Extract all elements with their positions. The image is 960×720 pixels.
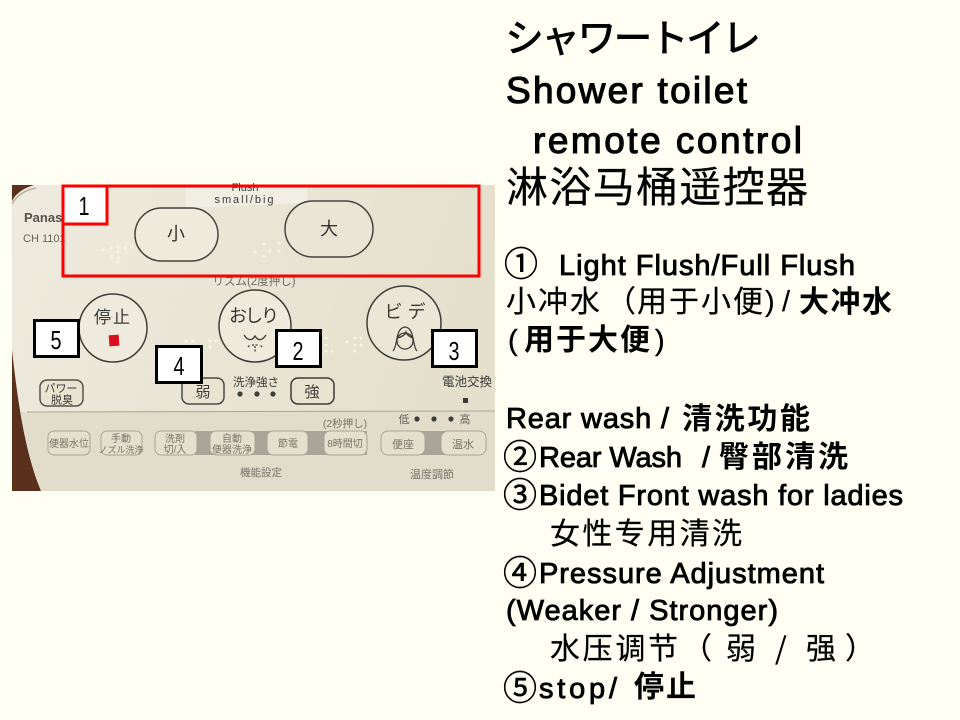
item 4: pressure adjustment: 水压调节 [550, 624, 678, 668]
label: temperature level: 高 [460, 412, 470, 426]
button: power deodorize [40, 380, 83, 406]
number tag 4 [156, 346, 202, 382]
item 1: light flush / full flush: ) [765, 286, 775, 318]
item 2: rear wash [503, 430, 848, 479]
item 5: stop: 停止 [634, 662, 696, 706]
small buttons row: 節電 [278, 437, 298, 450]
number tag 3 [432, 330, 476, 366]
item 4: pressure adjustment: (Weaker / Stronger) [506, 595, 778, 627]
item 1: light flush / full flush: ) [655, 325, 665, 357]
divider [27, 411, 495, 412]
brand label: Panas [24, 210, 62, 225]
item 3: bidet: 女性专用清洗 [550, 509, 742, 553]
button: strong: 強 [304, 384, 320, 401]
item 4: pressure adjustment [503, 546, 875, 668]
item 1: light flush / full flush: 小冲水 [506, 277, 600, 321]
small buttons row: ノズル洗浄 [98, 444, 144, 455]
label: battery change [442, 375, 492, 403]
item 3: bidet [503, 468, 903, 553]
title: English line 1: Shower toilet [506, 70, 748, 111]
button: stop: 停止 [94, 303, 130, 328]
item 1: light flush / full flush: 用于大便 [524, 315, 650, 359]
item 5: stop: stop/ [539, 673, 618, 705]
item 3: bidet: Bidet Front wash for ladies [539, 480, 903, 512]
number tag 4: 4 [174, 351, 184, 381]
item 1: light flush / full flush: / [782, 286, 791, 318]
small buttons row [48, 431, 486, 456]
item 4: pressure adjustment: 强 [806, 624, 836, 668]
item: rear wash heading: 清洗功能 [682, 394, 810, 438]
button: stop [79, 294, 147, 362]
item 4: pressure adjustment: 弱 [726, 624, 756, 668]
item 1: light flush / full flush: ( [508, 325, 518, 357]
item 4: pressure adjustment: / [775, 624, 787, 668]
title: Japanese: シャワートイレ [505, 8, 761, 64]
button band [195, 431, 480, 455]
item: rear wash heading: Rear wash / [506, 403, 670, 435]
item: rear wash heading [506, 394, 810, 438]
small buttons row: 温水 [452, 438, 474, 451]
item 1: light flush / full flush: ① [504, 237, 538, 286]
number tag 1 [63, 186, 107, 224]
button: small flush [135, 208, 218, 261]
button: strong [291, 378, 334, 404]
label: temperature adjust: 温度調節 [410, 467, 454, 481]
item 2: rear wash: Rear Wash [539, 442, 682, 474]
title: English line 2: remote control [533, 120, 802, 161]
braille dots [102, 242, 362, 352]
small buttons row: 便器水位 [49, 437, 89, 450]
item 4: pressure adjustment: Pressure Adjustment [539, 558, 824, 590]
item 5: stop: ⑤ [503, 661, 537, 710]
label: temperature level [398, 412, 470, 426]
button: big flush: 大 [320, 215, 338, 241]
small buttons row: 切/入 [164, 444, 186, 456]
label: rhythm: リズム(2度押し) [212, 274, 296, 288]
button: rear wash: おしり [229, 302, 279, 328]
button: power deodorize: パワー [44, 382, 78, 395]
label: battery change: 電池交換 [442, 375, 492, 389]
item 1: light flush / full flush: Light Flush/Full Flush [559, 250, 855, 282]
button: bidet: ビデ [384, 298, 426, 324]
small buttons row: 手動 [111, 432, 131, 445]
number tag 5 [34, 320, 78, 356]
highlight box 1: flush buttons [63, 186, 479, 276]
remote body [12, 185, 495, 491]
number tag 2: 2 [292, 336, 304, 366]
label: two second press: (2秒押し) [323, 417, 367, 430]
small buttons row: 自動 [222, 432, 242, 445]
button: bidet [367, 286, 441, 360]
number tag 3: 3 [448, 336, 460, 366]
sticker: flush small big: Flush [232, 182, 258, 194]
item 3: bidet: ③ [503, 468, 537, 517]
number tag 5: 5 [50, 325, 62, 355]
small buttons row: 洗剤 [165, 433, 185, 445]
button: small flush: 小 [167, 220, 185, 246]
sticker: flush small big: small/big [214, 194, 274, 206]
remote top edge highlight [12, 188, 36, 204]
item 4: pressure adjustment: ） [845, 624, 875, 668]
item 2: rear wash: / [702, 442, 711, 474]
label: wash strength [233, 375, 279, 397]
item 1: light flush / full flush [504, 237, 892, 359]
item 5: stop [503, 661, 696, 710]
small buttons row: 8時間切 [327, 438, 363, 450]
sticker: flush small big [186, 182, 308, 208]
icon: woman face [393, 327, 417, 351]
item 1: light flush / full flush: （ [606, 277, 636, 321]
lower section shade [20, 412, 244, 491]
number tag 1: 1 [78, 191, 90, 221]
small buttons row: 便器洗浄 [212, 443, 252, 456]
button: weak: 弱 [195, 384, 211, 401]
model label: CH 1101 [23, 233, 66, 245]
small buttons row: 便座 [392, 438, 414, 451]
label: function settings: 機能設定 [240, 466, 282, 479]
button: power deodorize: 脱臭 [51, 392, 73, 406]
item 1: light flush / full flush: 用于小便 [637, 277, 763, 321]
button: rear wash [219, 290, 291, 362]
item 2: rear wash: 臀部清洗 [719, 432, 848, 476]
item 4: pressure adjustment: （ [682, 624, 712, 668]
button: weak [182, 378, 224, 404]
item 1: light flush / full flush: 大冲水 [799, 277, 892, 321]
panel: remote control photo [12, 182, 495, 491]
label: wash strength: 洗浄強さ [233, 375, 279, 389]
label: temperature level: 低 [398, 413, 410, 426]
number tag 2 [276, 330, 320, 366]
item 4: pressure adjustment: ④ [503, 546, 537, 595]
button: big flush [285, 201, 373, 257]
title: Chinese: 淋浴马桶遥控器 [506, 154, 808, 215]
item 2: rear wash: ② [503, 430, 537, 479]
